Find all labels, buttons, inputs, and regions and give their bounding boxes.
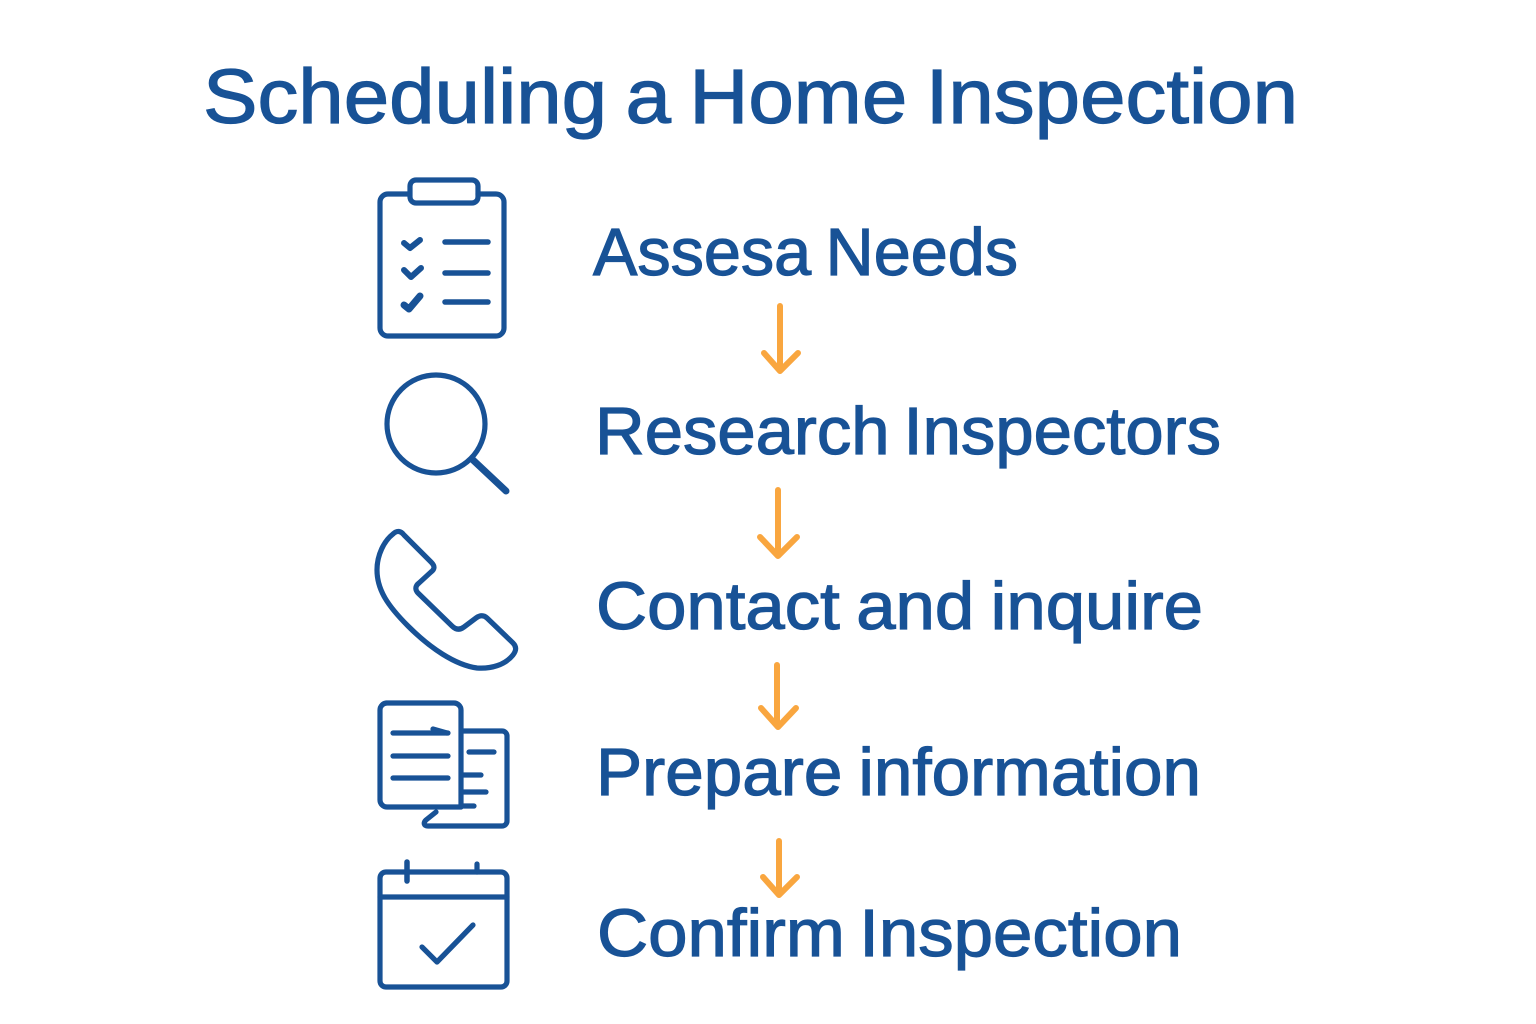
arrow: step 2 to step 3: [760, 490, 797, 556]
icon: magnifying glass: [387, 375, 506, 491]
step label: Prepare information: Prepare information: [596, 735, 1201, 810]
icon: telephone: [377, 531, 516, 668]
step label: Research Inspectors: Research Inspectors: [595, 394, 1221, 469]
icon: documents: [380, 703, 507, 826]
step label: Confirm Inspection: Confirm Inspection: [597, 896, 1182, 971]
step label: Contact and inquire: Contact and inquire: [596, 569, 1203, 644]
arrow: step 1 to step 2: [764, 306, 798, 371]
icon: clipboard checklist: [380, 180, 504, 336]
arrow: step 4 to step 5: [763, 841, 797, 895]
title: Scheduling a Home Inspection: [203, 54, 1298, 140]
step label: Assesa Needs: Assesa Needs: [593, 215, 1018, 290]
arrow: step 3 to step 4: [761, 665, 796, 727]
icon: calendar with check: [380, 862, 507, 987]
